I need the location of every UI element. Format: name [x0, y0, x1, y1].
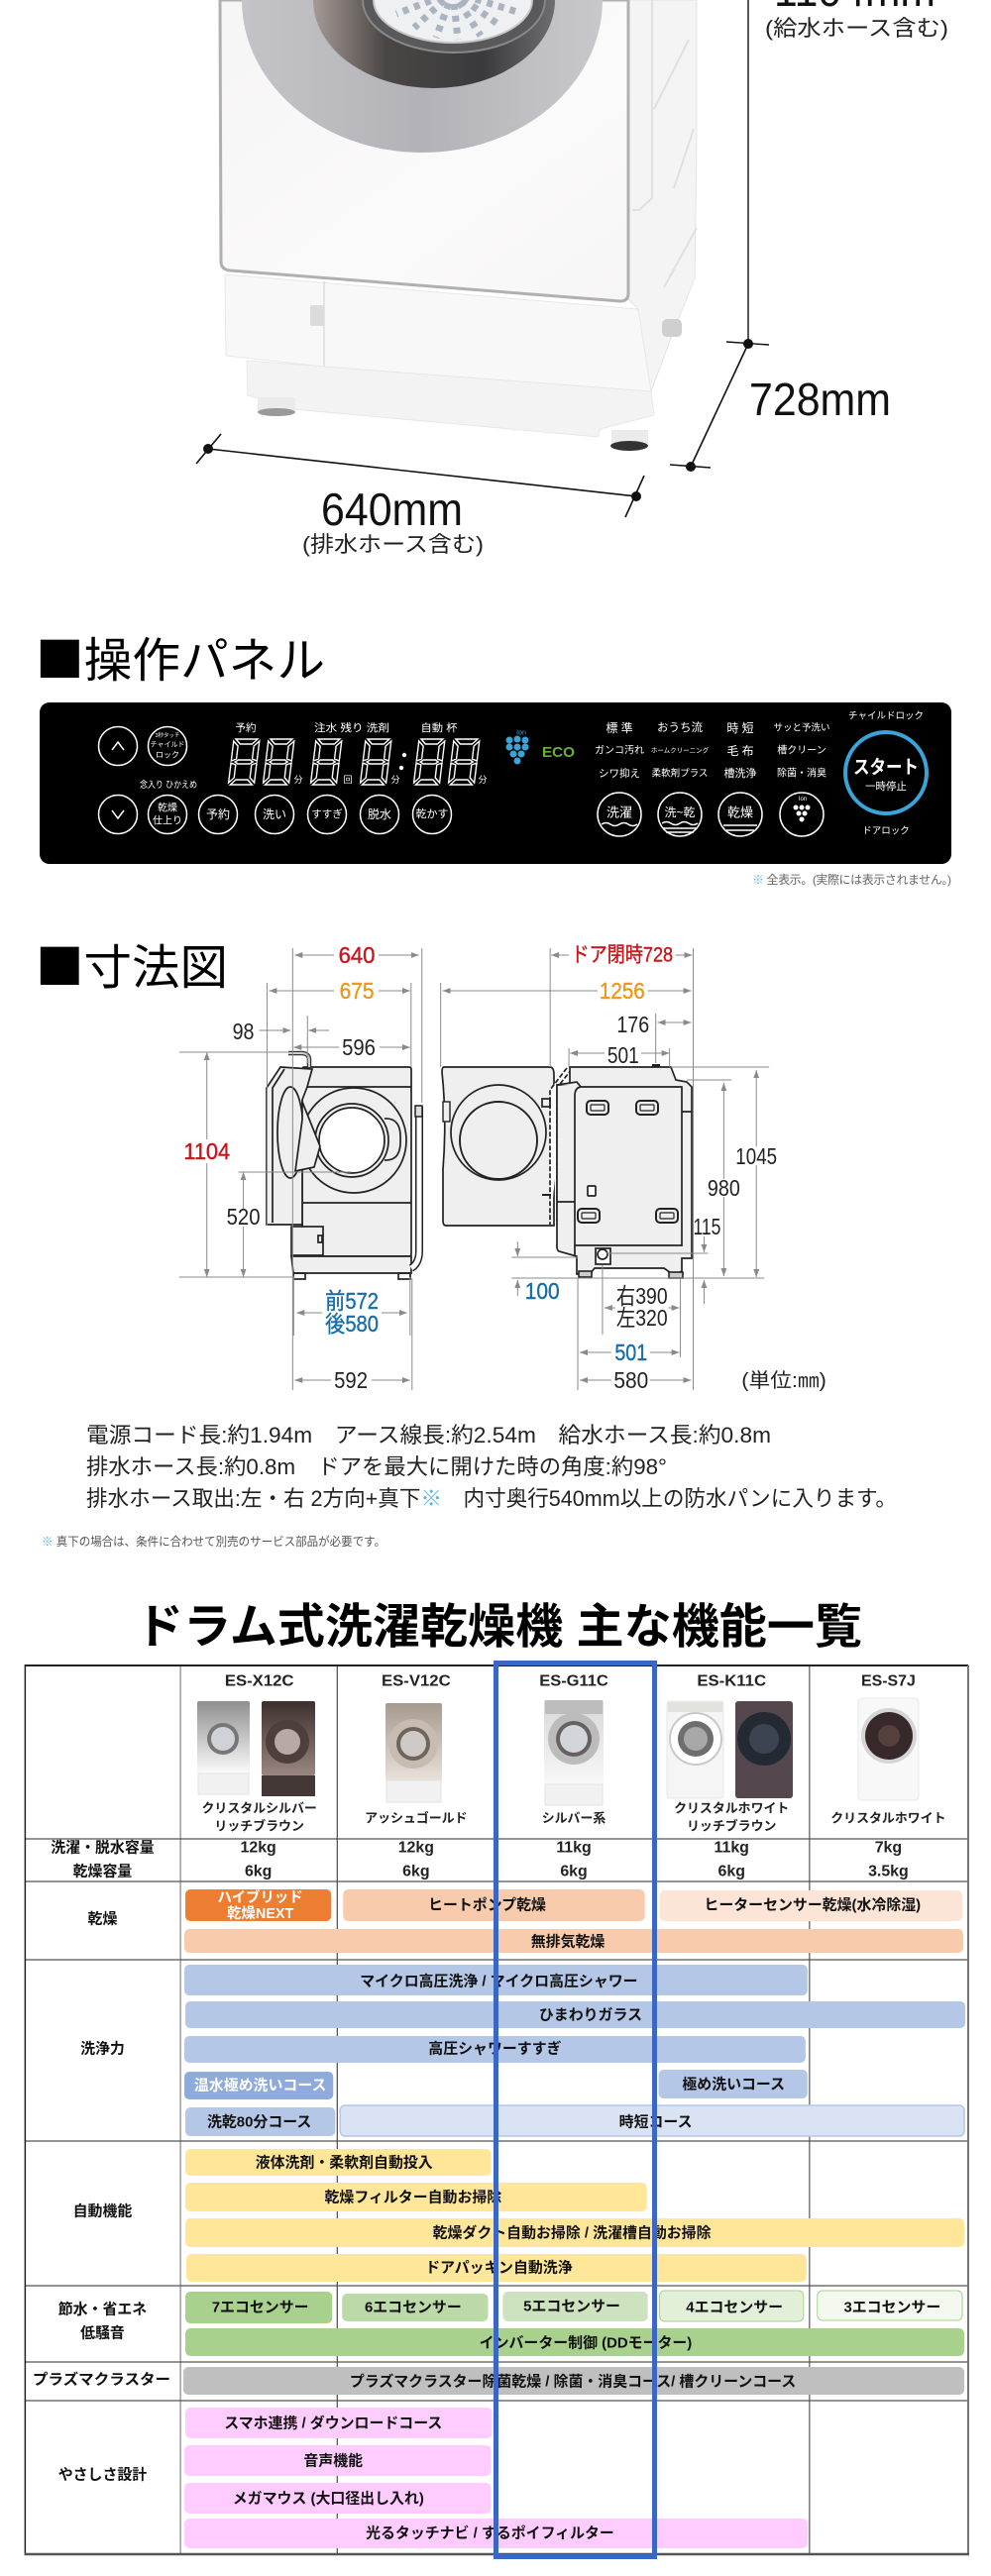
bar: 4 eco sensors: 4エコセンサー — [686, 2299, 783, 2316]
bar: heat pump drying: ヒートポンプ乾燥 — [428, 1895, 546, 1914]
course labels: 槽洗浄 — [723, 766, 757, 780]
seven-segment display: 分 — [390, 775, 400, 785]
course labels: ガンコ汚れ — [595, 743, 644, 757]
highlight: ES-G11C column — [496, 1663, 654, 2556]
comparison table — [25, 1664, 969, 2555]
course labels: ホームクリーニング — [651, 745, 710, 755]
drawer pull — [310, 305, 324, 326]
rinse button — [307, 795, 347, 834]
dim: 1256: 1256 — [600, 978, 645, 1004]
dim: front 572 rear 580 — [296, 1288, 407, 1337]
front right foot — [610, 430, 648, 451]
bar: sunflower glass — [185, 2001, 965, 2028]
diagram: side view — [267, 1053, 422, 1279]
dim: 176: 176 — [616, 1012, 649, 1037]
dim: 98 — [233, 1019, 329, 1044]
bar: time-saving course: 時短コース — [619, 2112, 693, 2131]
course labels: サッと予洗い — [773, 721, 830, 733]
model names — [225, 1672, 916, 1690]
child lock button: チャイルド — [151, 741, 184, 749]
bar: auto filter cleaning: 乾燥フィルター自動お掃除 — [325, 2188, 501, 2206]
bar: touch navi and filter — [184, 2519, 808, 2548]
side panel seams — [632, 0, 697, 287]
product: ES-G11C — [544, 1700, 604, 1805]
dim: 520: 520 — [227, 1204, 260, 1230]
dim: 501 bottom: 501 — [614, 1340, 647, 1365]
top knob — [652, 1064, 660, 1067]
eco label: ECO — [542, 744, 575, 761]
dim: 580: 580 — [613, 1367, 648, 1393]
bar: ventless drying — [184, 1929, 963, 1953]
bar: 4 eco sensors — [660, 2291, 804, 2321]
bar: high pressure rinse: 高圧シャワーすすぎ — [428, 2039, 562, 2058]
capacity values: 7kg — [875, 1839, 902, 1857]
wash course button: 洗濯 — [606, 805, 632, 820]
door latches — [542, 1099, 551, 1196]
pipe — [288, 1053, 309, 1067]
bar: inverter — [185, 2328, 964, 2356]
dimension: width 640mm: 640mm — [321, 483, 463, 535]
body — [557, 1067, 692, 1275]
bar: 80 minute course: 洗乾80分コース — [207, 2112, 311, 2131]
dark drum ring — [313, 0, 555, 88]
lower base — [247, 361, 654, 437]
course labels: シワ抑え — [599, 767, 640, 780]
bar: 80 minute course — [185, 2107, 335, 2136]
wash course button — [598, 793, 641, 836]
course labels: おうち流 — [657, 721, 703, 734]
dim: front 572 rear 580: 前572 — [325, 1288, 379, 1314]
bar: 3 eco sensors — [818, 2291, 962, 2320]
bar: smartphone: スマホ連携 / ダウンロードコース — [224, 2414, 442, 2432]
bar: mega mouth — [184, 2483, 491, 2514]
bar: touch navi and filter: 光るタッチナビ / するポイフィルター — [366, 2523, 614, 2542]
handle lobe — [385, 1119, 400, 1160]
bar: ventless drying: 無排気乾燥 — [531, 1932, 605, 1951]
row label: eco — [58, 2300, 147, 2342]
row label: friendly design: やさしさ設計 — [58, 2466, 147, 2484]
silver oval — [242, 0, 603, 153]
dim: 501 top: 501 — [607, 1042, 639, 1068]
capacity values: 6kg — [245, 1863, 272, 1880]
dry finish button — [149, 795, 186, 834]
dimension: height value — [765, 0, 948, 41]
row labels: capacity: 洗濯・脱水容量 — [51, 1838, 155, 1857]
dim: right 390 left 320 — [605, 1283, 680, 1331]
seven-segment display: 分 — [478, 775, 488, 785]
dry button — [412, 795, 452, 834]
model names: ES-S7J — [861, 1672, 916, 1690]
bar: high pressure rinse — [184, 2036, 806, 2063]
dim: 580 — [580, 1367, 692, 1393]
door — [442, 1067, 554, 1226]
spin button: 脱水 — [368, 806, 391, 821]
dim: 1045: 1045 — [735, 1143, 777, 1169]
dimension: width 640mm: (排水ホース含む) — [302, 532, 484, 557]
open door — [267, 1067, 312, 1225]
bar: deep wash course: 極め洗いコース — [682, 2075, 785, 2093]
front door panel — [220, 0, 628, 301]
drawer seam — [323, 281, 325, 367]
course labels — [595, 720, 830, 780]
color names: リッチブラウン — [214, 1818, 304, 1834]
capacity values: 11kg — [556, 1839, 592, 1857]
dim: 520 — [227, 1172, 260, 1277]
bar: hot water course — [184, 2072, 333, 2099]
bar: inverter: インバーター制御 (DDモーター) — [480, 2333, 692, 2352]
extension lines — [179, 948, 769, 1390]
bar: smartphone — [185, 2408, 492, 2438]
dim: front 572 rear 580: 後580 — [325, 1311, 379, 1337]
dim: 115 — [694, 1214, 720, 1304]
bar: hot water course: 温水極め洗いコース — [194, 2076, 326, 2094]
panel footnote: ※ 全表示。(実際には表示されません。) — [752, 873, 951, 887]
spin button — [361, 795, 398, 834]
row labels: capacity — [51, 1838, 155, 1880]
dim: right 390 left 320: 右390 — [616, 1283, 668, 1309]
title: feature list: ドラム式洗濯乾燥機 主な機能一覧 — [136, 1601, 862, 1654]
dim: 592: 592 — [334, 1367, 368, 1393]
wash-dry course button: 洗~乾 — [664, 805, 696, 819]
model names: ES-X12C — [225, 1672, 294, 1690]
door glass — [460, 1102, 537, 1179]
bar: voice: 音声機能 — [303, 2451, 363, 2470]
bar: heater sensor drying — [660, 1890, 962, 1921]
bar: hybrid drying: ハイブリッド — [218, 1888, 303, 1906]
bar: sunflower glass: ひまわりガラス — [539, 2006, 642, 2024]
bar: door seal auto wash — [186, 2254, 807, 2282]
bar: 6 eco sensors: 6エコセンサー — [365, 2299, 462, 2316]
wash button: 洗い — [263, 807, 286, 821]
capacity values: 6kg — [560, 1863, 588, 1880]
course labels: 時 短 — [726, 721, 754, 735]
dimension: depth 728mm — [670, 344, 891, 472]
base — [291, 1256, 411, 1273]
dim: 596 — [293, 1034, 410, 1060]
dimensions group — [179, 942, 826, 1393]
color names: リッチブラウン — [687, 1818, 776, 1834]
dimension: height value: (給水ホース含む) — [765, 16, 948, 41]
capacity values — [241, 1839, 909, 1880]
bar: time-saving course — [340, 2105, 964, 2136]
bar: 6 eco sensors — [342, 2294, 488, 2321]
side shoulder and inner panel — [557, 1082, 682, 1245]
product: ES-S7J — [858, 1698, 919, 1800]
dim: 592 — [294, 1367, 410, 1393]
course labels: 槽クリーン — [777, 743, 826, 757]
reserve button — [198, 795, 238, 834]
drawer box — [291, 1227, 323, 1255]
color names — [202, 1800, 946, 1834]
feet — [579, 1271, 683, 1278]
color names: アッシュゴールド — [365, 1810, 468, 1826]
model names: ES-K11C — [697, 1672, 767, 1690]
machine side panel — [626, 0, 697, 391]
capacity values: 12kg — [398, 1839, 434, 1857]
door handle — [443, 1102, 450, 1122]
bar: hybrid drying — [185, 1888, 331, 1922]
product: ES-V12C — [385, 1703, 442, 1802]
door inner line — [273, 1069, 284, 1223]
capacity values: 6kg — [718, 1863, 745, 1880]
child lock button: 3秒タッチ — [155, 731, 180, 739]
dim: 100: 100 — [525, 1278, 560, 1304]
display captions: 自動 杯 — [420, 721, 458, 734]
color names: シルバー系 — [542, 1810, 606, 1826]
seven-segment display: 回 — [343, 775, 353, 785]
bar: auto filter cleaning — [185, 2183, 647, 2211]
hose — [411, 1106, 422, 1268]
down button — [99, 795, 137, 834]
drum opening — [319, 1108, 385, 1173]
drum interior — [374, 0, 532, 43]
display captions: 予約 — [236, 721, 256, 734]
row label: eco: 低騒音 — [80, 2324, 125, 2342]
door bowl — [295, 1102, 320, 1171]
bar: auto duct and tub cleaning — [185, 2218, 964, 2247]
capacity values: 12kg — [241, 1839, 276, 1857]
dim: 501 top — [570, 1042, 670, 1068]
base drawer box — [225, 274, 651, 391]
feet — [293, 1273, 410, 1279]
hero: washing machine photo — [220, 0, 697, 451]
bar: micro high pressure — [184, 1965, 808, 1995]
color names: クリスタルホワイト — [674, 1800, 789, 1816]
dim: 640: 640 — [339, 942, 375, 968]
dimension: width 640mm — [196, 434, 644, 557]
unit note: (単位:㎜) — [741, 1369, 826, 1392]
seven-segment display: 分 — [293, 775, 303, 785]
product: ES-K11C white — [667, 1701, 723, 1798]
handles — [578, 1101, 678, 1223]
dry course button — [718, 793, 762, 836]
upper and lower lines — [302, 1087, 411, 1203]
icon: ion grapes: Ion — [516, 729, 526, 737]
row labels: capacity: 乾燥容量 — [73, 1862, 132, 1880]
text: spec notes: 排水ホース取出:左・右 2方向+真下※ 内寸奥行540mm以上の防水パンに入ります。 — [86, 1486, 897, 1511]
dim: 501 bottom — [580, 1340, 680, 1365]
small slot — [588, 1186, 596, 1196]
text: spec notes: 排水ホース長:約0.8m ドアを最大に開けた時の角度:約98° — [86, 1454, 667, 1479]
row label: cleaning: 洗浄力 — [80, 2039, 125, 2058]
ion button — [780, 793, 824, 836]
panel background — [40, 702, 951, 864]
rear foot — [662, 319, 682, 337]
bar: 3 eco sensors: 3エコセンサー — [843, 2299, 940, 2316]
bar: mega mouth: メガマウス (大口径出し入れ) — [233, 2489, 424, 2508]
table grid — [25, 1664, 969, 2555]
dim: right 390 left 320: 左320 — [616, 1305, 668, 1331]
bar: auto detergent: 液体洗剤・柔軟剤自動投入 — [256, 2153, 433, 2172]
display captions: 注水 残り 洗剤 — [314, 721, 389, 734]
start button: 一時停止 — [865, 780, 907, 793]
diagram: front view with open door — [442, 1064, 692, 1278]
bar: plasmacluster: プラズマクラスター除菌乾燥 / 除菌・消臭コース/ 槽クリーンコース — [350, 2372, 796, 2391]
bar: auto detergent — [185, 2149, 491, 2176]
door ring — [451, 1085, 546, 1180]
dry course button: 乾燥 — [727, 805, 753, 820]
dim: 675: 675 — [340, 978, 374, 1004]
door glass — [277, 1087, 303, 1178]
dim: 1104: 1104 — [183, 1138, 230, 1164]
glass door — [363, 0, 545, 53]
wash-dry course button — [658, 793, 702, 836]
bar: hybrid drying: 乾燥NEXT — [227, 1904, 293, 1922]
text: spec notes — [86, 1423, 897, 1511]
dim: 115: 115 — [694, 1214, 720, 1239]
bar: auto duct and tub cleaning: 乾燥ダクト自動お掃除 / 洗濯槽自動お掃除 — [433, 2223, 712, 2242]
bar: deep wash course — [659, 2070, 808, 2098]
up button — [99, 727, 137, 765]
drum outer — [301, 1088, 406, 1193]
heading: dimensions: ■寸法図 — [36, 928, 228, 998]
heading: control panel: ■操作パネル — [36, 621, 325, 691]
footnote: ※ 真下の場合は、条件に合わせて別売のサービス部品が必要です。 — [42, 1534, 385, 1549]
child lock button — [149, 727, 186, 765]
seven-segment display — [228, 739, 488, 785]
display captions — [236, 721, 458, 734]
product: ES-K11C brown — [735, 1701, 793, 1798]
row label: plasmacluster: プラズマクラスター — [33, 2370, 170, 2389]
child lock caption: チャイルドロック — [848, 711, 924, 721]
child lock button: ロック — [156, 751, 179, 759]
ion button: Ion — [799, 797, 807, 803]
reserve button: 予約 — [206, 806, 230, 821]
drum tile pattern — [396, 0, 517, 40]
bar: micro high pressure: マイクロ高圧洗浄 / マイクロ高圧シャワー — [360, 1972, 638, 1990]
color names: クリスタルホワイト — [830, 1810, 946, 1826]
door lock caption: ドアロック — [862, 826, 910, 836]
wash button — [256, 795, 293, 834]
dim: 98: 98 — [233, 1019, 255, 1044]
front left foot — [258, 397, 295, 416]
dry button: 乾かす — [416, 807, 448, 820]
color names: クリスタルシルバー — [202, 1800, 317, 1816]
start button — [845, 732, 927, 813]
drawer knob — [318, 1235, 322, 1242]
inner bottom — [557, 1112, 692, 1256]
model names: ES-V12C — [382, 1672, 451, 1690]
course labels: 除菌・消臭 — [777, 767, 826, 779]
drain — [596, 1248, 610, 1264]
dry finish caption: 念入り ひかえめ — [140, 780, 197, 790]
dim: 980: 980 — [708, 1175, 740, 1201]
drum ring — [315, 1104, 388, 1177]
bar: heat pump drying — [343, 1889, 645, 1921]
dimension: depth 728mm: 728mm — [749, 374, 891, 425]
row label: automation: 自動機能 — [73, 2201, 132, 2220]
dim: 640 — [294, 942, 419, 968]
course labels: 毛 布 — [726, 744, 754, 758]
row label: drying: 乾燥 — [88, 1909, 117, 1928]
model names: ES-G11C — [539, 1672, 608, 1690]
dimension: height line — [726, 0, 769, 349]
panel: control panel — [40, 702, 951, 864]
bar: 7 eco sensors — [185, 2292, 332, 2323]
capacity values: 3.5kg — [868, 1863, 909, 1880]
dim: door closed 728: ドア閉時728 — [572, 943, 673, 967]
bar: 5 eco sensors: 5エコセンサー — [523, 2298, 620, 2315]
start button: スタート — [853, 757, 919, 779]
bar: door seal auto wash: ドアパッキン自動洗浄 — [425, 2258, 573, 2277]
dry finish button: 仕上り — [153, 814, 182, 826]
dry finish button: 乾燥 — [158, 801, 177, 814]
icon: ion grapes — [505, 729, 529, 765]
row label: eco: 節水・省エネ — [58, 2300, 147, 2318]
text: spec notes: 電源コード長:約1.94m アース線長:約2.54m 給水ホース長:約0.8m — [86, 1423, 771, 1448]
dim: 100 — [517, 1241, 560, 1304]
capacity values: 6kg — [402, 1863, 430, 1880]
dim: 596: 596 — [342, 1034, 376, 1060]
bar: plasmacluster — [183, 2367, 964, 2395]
bar: heater sensor drying: ヒーターセンサー乾燥(水冷除湿) — [704, 1895, 921, 1914]
bar: 5 eco sensors — [502, 2292, 648, 2321]
rinse button: すすぎ — [311, 807, 343, 820]
bar: 7 eco sensors: 7エコセンサー — [212, 2299, 309, 2316]
body — [302, 1067, 411, 1256]
course labels: 柔軟剤プラス — [652, 767, 708, 779]
dim: 176 — [616, 1012, 692, 1037]
bar: voice — [184, 2445, 491, 2476]
hinge dashes — [550, 1068, 572, 1225]
course labels: 標 準 — [606, 720, 633, 735]
product: ES-X12C brown — [262, 1701, 315, 1796]
product: ES-X12C silver — [197, 1701, 250, 1794]
capacity values: 11kg — [715, 1839, 749, 1857]
